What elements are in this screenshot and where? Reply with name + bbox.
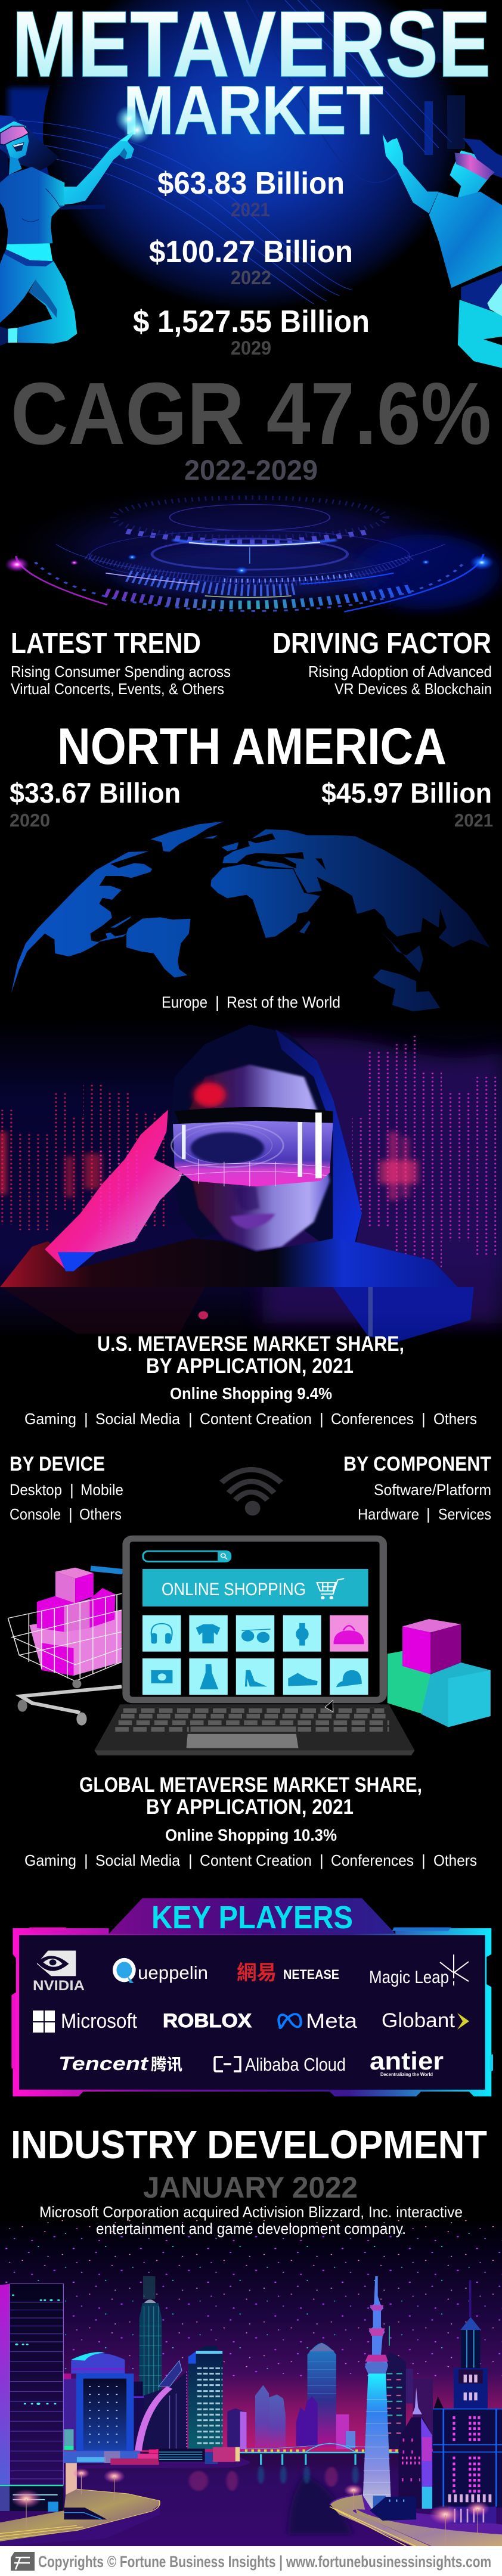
logo: Queppelin (113, 1958, 208, 1983)
logo: Antier: Decentralizing the World (380, 2072, 433, 2077)
palace building (433, 2280, 502, 2507)
text: U.S. application segments: Content Creation (200, 1410, 312, 1428)
text: global application segments: | (422, 1851, 426, 1869)
night sky (0, 2217, 502, 2455)
panel: by device: Console (10, 1505, 61, 1523)
skyline glass tower (140, 2276, 162, 2397)
stat: North America 2021: $45.97 Billion (321, 777, 492, 809)
text: global application segments: | (320, 1851, 324, 1869)
panel: by device: Desktop (10, 1481, 62, 1499)
panel: by device: Mobile (80, 1481, 123, 1499)
panel: latest trend: Virtual Concerts, Events, & Others (11, 680, 224, 698)
shopping tiles (142, 1615, 368, 1695)
text: online shopping banner: ONLINE SHOPPING (162, 1580, 306, 1599)
logo: Meta: Meta (306, 2010, 357, 2033)
panel: driving factor: Rising Adoption of Advanced (308, 663, 492, 680)
left shore (0, 2489, 160, 2546)
text: global application segments: | (84, 1851, 88, 1869)
heading: U.S. market share: Online Shopping 9.4% (170, 1384, 332, 1403)
panel: latest trend: LATEST TREND (11, 627, 201, 660)
stat: 2021 market size (157, 166, 345, 220)
panel: by component: | (426, 1505, 430, 1523)
stat: North America 2020 (10, 777, 181, 831)
text: U.S. application segments: Gaming (24, 1410, 76, 1428)
heading: U.S. market share: U.S. METAVERSE MARKET SHARE, (97, 1332, 404, 1356)
illustration: laptop with online shopping screen (94, 1539, 414, 1755)
left tower (0, 2284, 63, 2512)
central waterfront (63, 2447, 250, 2497)
text: development description: Microsoft Corporation acquired Activision Blizzard, Inc. interactive (39, 2203, 463, 2221)
midrise cluster (227, 2343, 355, 2449)
panel: by component: Hardware (358, 1505, 419, 1523)
arched building (134, 2361, 187, 2451)
heading: global market share: BY APPLICATION, 2021 (146, 1795, 354, 1819)
logo: Magic Leap: Magic Leap (369, 1968, 449, 1987)
text: U.S. application segments: Others (433, 1410, 477, 1428)
heading: U.S. market share (97, 1332, 404, 1403)
heading: global market share: Online Shopping 10.3% (165, 1826, 337, 1844)
stat: North America 2021: 2021 (454, 810, 493, 831)
stat: 2022 market size: 2022 (231, 267, 271, 288)
heading: North America: NORTH AMERICA (57, 718, 447, 775)
panel: driving factor (272, 627, 492, 698)
logo: Microsoft: Microsoft (61, 2010, 138, 2033)
heading: global market share: GLOBAL METAVERSE MARKET SHARE, (79, 1773, 422, 1797)
logo: Microsoft (33, 2010, 138, 2033)
logo: Roblox: ROBLOX (163, 2010, 252, 2031)
date: January 2022: JANUARY 2022 (143, 2171, 358, 2204)
icon: wifi (222, 1469, 281, 1515)
stat: North America 2021 (321, 777, 493, 831)
icon: shopping cart (317, 1578, 344, 1599)
text: global application segments: Content Creation (200, 1851, 312, 1869)
footer (0, 2546, 502, 2576)
panel: by component: Services (438, 1505, 491, 1523)
laptop keyboard (94, 1704, 414, 1755)
river (0, 2452, 502, 2546)
logo: NetEase: NETEASE (283, 1967, 339, 1982)
text: global application segments: Gaming (24, 1851, 76, 1869)
stat: North America 2020: 2020 (10, 810, 50, 831)
logo: NetEase (237, 1962, 339, 1984)
heading: key players: KEY PLAYERS (151, 1900, 353, 1935)
title: MARKET (123, 72, 383, 149)
text: other regions: Europe (162, 993, 207, 1011)
panel: latest trend (11, 627, 231, 698)
panel: by device: | (69, 1505, 73, 1523)
panel: key players frame (11, 1898, 493, 2096)
text: global application segments: | (188, 1851, 193, 1869)
photo lower fade (0, 1287, 474, 1342)
panel: by device (10, 1453, 123, 1523)
CAGR heading: 2022-2029 (184, 454, 318, 486)
panel: by device: | (70, 1481, 74, 1499)
heading: U.S. market share: BY APPLICATION, 2021 (146, 1354, 354, 1378)
panel: by component: Software/Platform (374, 1481, 491, 1499)
stat: 2029 market size: $ 1,527.55 Billion (133, 304, 370, 339)
text: global application segments: Others (433, 1851, 477, 1869)
logo: Tencent (58, 2053, 182, 2074)
logo: Alibaba Cloud (215, 2054, 346, 2075)
logo: Queppelin: ueppelin (138, 1962, 208, 1983)
cityscape illustration (0, 2217, 502, 2546)
panel: by component (343, 1453, 491, 1523)
stat: North America 2020: $33.67 Billion (10, 777, 181, 809)
text: U.S. application segments: | (422, 1410, 426, 1428)
text: global application segments: Social Media (95, 1851, 181, 1869)
text: development description: entertainment and game development company. (96, 2220, 406, 2238)
stat: 2022 market size: $100.27 Billion (149, 235, 353, 269)
stat: 2022 market size (149, 235, 353, 288)
stat: 2029 market size (133, 304, 370, 359)
text: U.S. application segments (24, 1410, 477, 1428)
logo: Alibaba Cloud: Alibaba Cloud (245, 2054, 346, 2075)
sky tower (362, 2276, 391, 2509)
text: U.S. application segments: Conferences (331, 1410, 414, 1428)
hero background glow (8, 0, 465, 311)
windowed high-rise (188, 2346, 222, 2449)
text: U.S. application segments: | (188, 1410, 193, 1428)
text: other regions (162, 993, 340, 1011)
world globe map (11, 821, 490, 1011)
text: other regions: Rest of the World (227, 993, 340, 1011)
illustration: woman with VR headset (0, 105, 151, 346)
illustration: shopping cart with boxes (8, 1568, 123, 1726)
text: U.S. application segments: Social Media (95, 1410, 181, 1428)
logo: Meta (278, 2010, 357, 2033)
icon: Fortune Business Insights logo (11, 2552, 35, 2571)
logo: Magic Leap (369, 1954, 469, 1987)
logo: NVIDIA: NVIDIA (33, 1978, 85, 1994)
text: global application segments: Conferences (331, 1851, 414, 1869)
panel: by device: BY DEVICE (10, 1453, 105, 1475)
text: development description (39, 2203, 463, 2238)
stat: 2029 market size: 2029 (231, 337, 271, 359)
text: U.S. application segments: | (84, 1410, 88, 1428)
stat: 2021 market size: 2021 (231, 199, 270, 220)
stat: 2021 market size: $63.83 Billion (157, 166, 345, 201)
illustration: man with VR headset (383, 134, 502, 368)
panel: latest trend: Rising Consumer Spending across (11, 663, 231, 680)
icon: mouse pointer (325, 1700, 333, 1712)
text: global application segments (24, 1851, 477, 1869)
dome building (63, 2352, 134, 2451)
logo: Tencent: Tencent (58, 2053, 149, 2074)
bridge (237, 2443, 399, 2465)
text: other regions: | (216, 993, 219, 1011)
illustration: stacked boxes (388, 1619, 491, 1727)
logo: NVIDIA (33, 1951, 85, 1994)
heading: global market share (79, 1773, 422, 1844)
title (12, 0, 491, 149)
photo: woman wearing neon VR visor (0, 1017, 502, 1340)
logo: Antier: antier (370, 2047, 444, 2075)
panel: by device: Others (79, 1505, 122, 1523)
laptop screen (126, 1539, 383, 1700)
logo: NetEase: 網易 (237, 1962, 277, 1984)
HUD disc illustration (0, 481, 502, 616)
logo: Globant: Globant (382, 2009, 455, 2032)
text: U.S. application segments: | (320, 1410, 324, 1428)
right shore (329, 2494, 502, 2546)
street lamps (11, 2468, 490, 2546)
skyline right backdrop (386, 2326, 433, 2449)
tile icons (151, 1623, 364, 1689)
purple spired building (399, 2388, 432, 2509)
logo: Tencent: 腾讯 (151, 2056, 182, 2074)
